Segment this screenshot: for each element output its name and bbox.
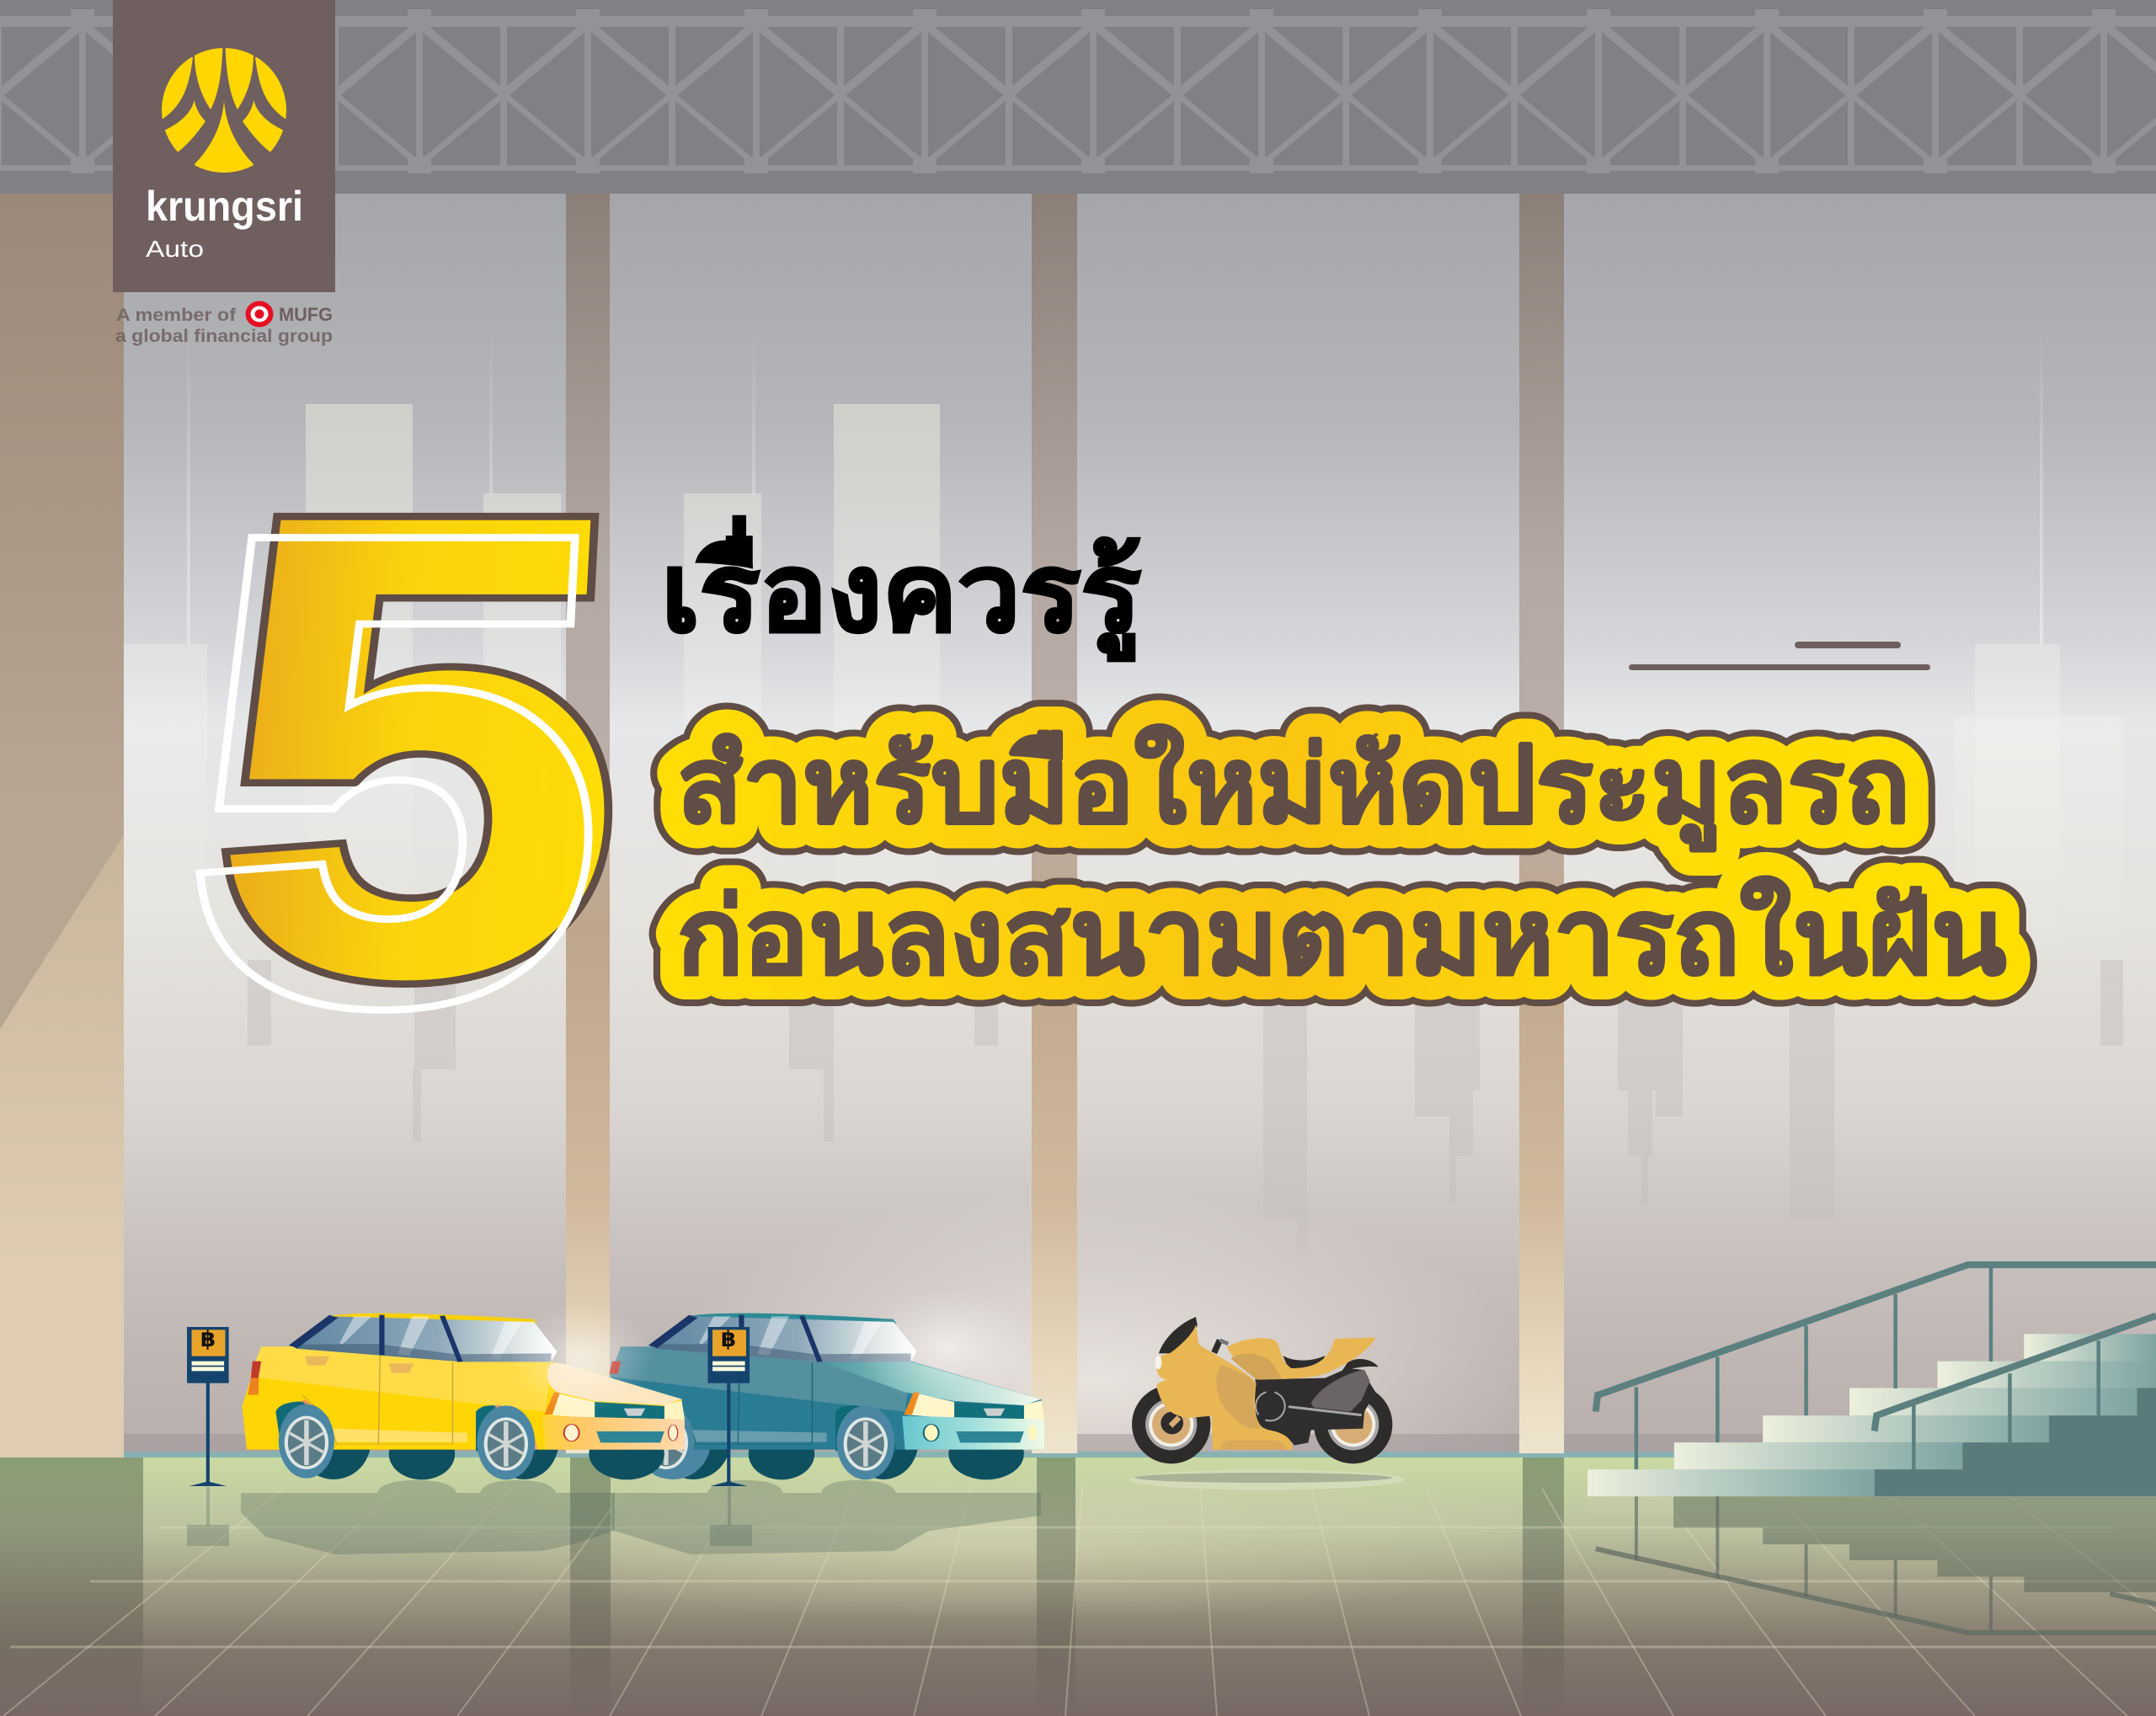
stair underside	[1875, 1388, 2156, 1496]
MUFG member line: a global financial group	[115, 327, 333, 346]
krungsri wordmark: krungsri	[146, 183, 303, 230]
big numeral 5: 5	[200, 384, 643, 1108]
MUFG member line: A member of	[116, 306, 237, 325]
frame and engine	[1253, 1368, 1375, 1446]
front handrail	[1875, 1316, 2156, 1431]
Auto label: Auto	[146, 236, 204, 262]
engine ring	[1256, 1392, 1285, 1420]
tank shade	[1231, 1354, 1283, 1379]
baht symbol left sign: ฿	[200, 1327, 216, 1352]
back railing posts	[1636, 1267, 1991, 1469]
dark wall skirting band	[124, 1434, 2156, 1452]
heading: yellow sticker title: ก่อนลงสนามตามหารถในฝัน	[677, 877, 2006, 996]
floor light patch	[404, 1461, 1583, 1621]
heading: yellow sticker title: สำหรับมือใหม่หัดประมูลรถ	[677, 725, 1910, 851]
decorative speed lines	[1629, 642, 1930, 670]
headlight glow yellow car	[510, 1303, 653, 1412]
vehicle reflections on floor	[187, 1480, 1041, 1554]
swing arm	[1289, 1407, 1362, 1415]
lower cowl shade	[1221, 1441, 1286, 1450]
heading: black line: เรื่องควรรู้	[661, 516, 1141, 662]
big numeral 5: 5	[200, 384, 643, 1108]
MUFG member line: MUFG	[279, 304, 333, 325]
rear wheel	[1314, 1385, 1392, 1463]
handlebar	[1214, 1340, 1219, 1353]
teal car	[601, 1314, 1044, 1479]
yellow car	[242, 1314, 685, 1479]
windscreen	[1159, 1317, 1198, 1353]
floor	[0, 1458, 2156, 1716]
headlight	[1155, 1356, 1161, 1369]
heading: yellow sticker title: ก่อนลงสนามตามหารถในฝัน	[677, 877, 2006, 996]
skyline: light buildings	[124, 324, 2123, 1010]
sign post right	[707, 1327, 750, 1486]
front railing posts	[1913, 1340, 2099, 1469]
steel truss band	[0, 0, 2156, 194]
sign post left	[187, 1327, 229, 1486]
teal baseboard	[124, 1452, 2156, 1458]
fairing shade	[1216, 1365, 1261, 1429]
back handrail	[1596, 1265, 2156, 1411]
staircase	[1588, 1265, 2156, 1633]
steps	[1588, 1334, 2156, 1496]
MUFG member line	[115, 303, 333, 346]
left wall column	[0, 194, 124, 1458]
heading: yellow sticker title: สำหรับมือใหม่หัดประมูลรถ	[677, 725, 1910, 851]
headlight glow teal car	[859, 1288, 1036, 1406]
brand panel	[113, 0, 335, 292]
big numeral 5	[195, 513, 613, 1014]
heading: yellow sticker title: สำหรับมือใหม่หัดประมูลรถ	[677, 725, 1910, 851]
vehicles scene	[187, 1314, 1044, 1486]
front wheel	[1132, 1385, 1210, 1463]
floor tile lines	[3, 1487, 2156, 1716]
rear mudguard	[1311, 1370, 1370, 1412]
pillar reflections on floor	[0, 1458, 1564, 1716]
glow on wall behind vehicles	[657, 1187, 1533, 1575]
icon: krungsri logo	[162, 48, 286, 173]
baht symbol right sign: ฿	[721, 1327, 736, 1352]
skyline: faint reflected buildings	[248, 960, 2123, 1255]
motorbike	[1129, 1317, 1404, 1490]
front fairing	[1156, 1324, 1293, 1450]
tank and seat	[1227, 1337, 1375, 1379]
shadow	[1129, 1469, 1404, 1490]
stair reflection on floor	[1588, 1496, 2156, 1633]
seat and tail dark	[1283, 1356, 1379, 1371]
heading: yellow sticker title	[677, 725, 2006, 996]
pillars	[566, 194, 1564, 1453]
heading: yellow sticker title: ก่อนลงสนามตามหารถในฝัน	[677, 877, 2006, 996]
